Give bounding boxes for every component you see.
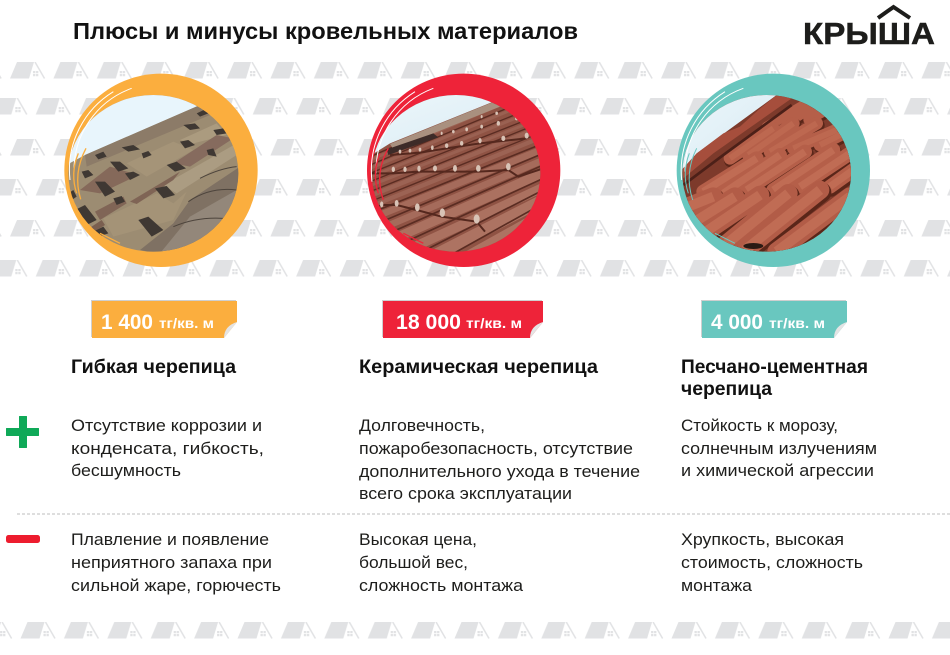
icon: minus (6, 535, 40, 543)
text: sand-cement tile pros: Стойкость к морозу, (681, 416, 838, 435)
text: sand-cement tile cons: Хрупкость, высокая (681, 530, 844, 549)
title: Плюсы и минусы кровельных материалов (73, 18, 578, 44)
text: ceramic tile pros: пожаробезопасность, отсутствие (359, 439, 633, 458)
text: flexible shingle cons: неприятного запаха при (71, 553, 272, 572)
text: ceramic tile cons: большой вес, (359, 553, 468, 572)
heading: flexible shingle: Гибкая черепица (71, 357, 236, 378)
text: sand-cement tile pros: и химической агрессии (681, 461, 874, 480)
text: sand-cement tile cons: стоимость, сложность (681, 553, 863, 572)
text: flexible shingle pros: бесшумность (71, 461, 181, 480)
text: flexible shingle cons (71, 530, 281, 595)
text: sand-cement tile cons: монтажа (681, 576, 753, 595)
text: ceramic tile pros: Долговечность, (359, 416, 485, 435)
panel: ceramic tile circle photo (367, 74, 560, 267)
text: ceramic tile pros: дополнительного ухода в течение (359, 462, 640, 481)
heading: sand-cement tile: черепица (681, 379, 772, 400)
heading: sand-cement tile (681, 357, 868, 400)
text: ceramic tile cons: сложность монтажа (359, 576, 524, 595)
text: ceramic tile cons: Высокая цена, (359, 530, 477, 549)
panel: flexible shingle circle photo (60, 74, 258, 267)
text: flexible shingle pros: Отсутствие коррозии и (71, 416, 262, 435)
price tag: sand-cement tile: тг/кв. м (769, 316, 825, 331)
price tag: flexible shingle: тг/кв. м (159, 316, 214, 331)
panel: sand-cement tile circle photo (673, 74, 870, 267)
text: sand-cement tile pros (681, 416, 877, 480)
text: ceramic tile cons (359, 530, 524, 595)
text: flexible shingle cons: сильной жаре, горючесть (71, 576, 281, 595)
price tag: ceramic tile: тг/кв. м (466, 316, 522, 331)
heading: sand-cement tile: Песчано-цементная (681, 357, 868, 378)
text: flexible shingle pros: конденсата, гибкость, (71, 439, 264, 458)
price tag: sand-cement tile: 4 000 (711, 311, 763, 334)
text: flexible shingle cons: Плавление и появление (71, 530, 269, 549)
logo: КРЫША (803, 16, 935, 51)
text: ceramic tile pros: всего срока эксплуатации (359, 484, 572, 503)
price tag: flexible shingle: 1 400 (101, 311, 153, 334)
price tag: ceramic tile: 18 000 (396, 311, 461, 334)
text: sand-cement tile pros: солнечным излучениям (681, 439, 877, 458)
price tag: ceramic tile (382, 300, 543, 338)
text: flexible shingle pros (71, 416, 264, 480)
price tag: flexible shingle (91, 300, 237, 338)
text: sand-cement tile cons (681, 530, 863, 595)
price tag: sand-cement tile (701, 300, 847, 338)
text: ceramic tile pros (359, 416, 640, 503)
icon: plus (6, 416, 38, 448)
heading: ceramic tile: Керамическая черепица (359, 357, 598, 378)
